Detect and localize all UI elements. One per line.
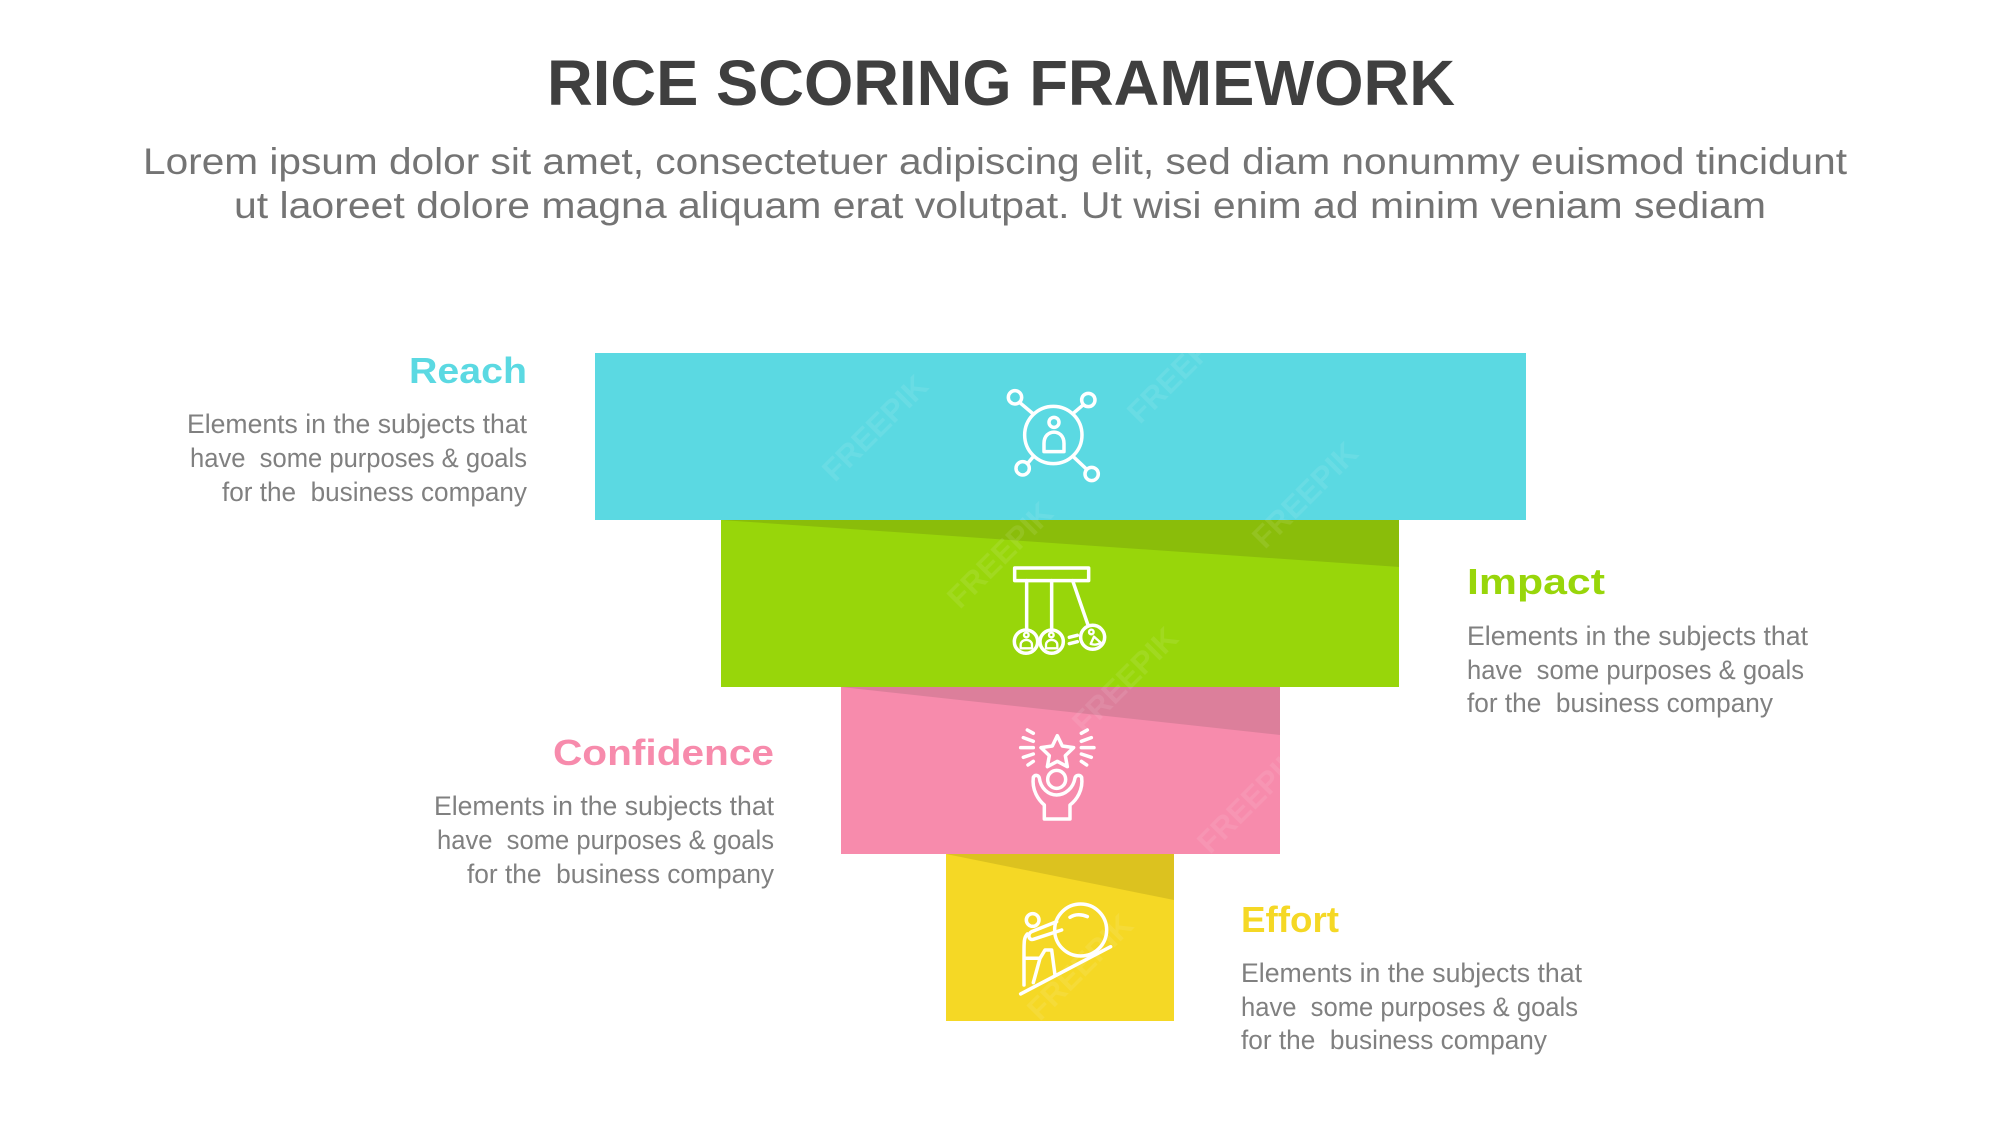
text block: impact: Impact — [1467, 561, 1605, 602]
subtitle: ut laoreet dolore magna aliquam erat volutpat. Ut wisi enim ad minim veniam sediam — [234, 185, 1766, 226]
funnel chart — [595, 353, 1526, 1021]
text: FREEPIK — [815, 368, 935, 488]
text: FREEPIK — [1120, 310, 1240, 430]
text: FREEPIK — [1065, 620, 1185, 740]
text block: confidence: Confidence — [553, 732, 774, 773]
icon: effort person pushing boulder — [1021, 904, 1111, 994]
text block: confidence: Elements in the subjects that — [434, 791, 774, 821]
text: FREEPIK — [940, 495, 1060, 615]
subtitle — [143, 141, 1848, 226]
text: FREEPIK — [1020, 907, 1140, 1027]
text block: reach — [187, 350, 527, 507]
panel: reach bar — [595, 353, 1526, 520]
icon: impact pendulum — [1014, 568, 1105, 653]
text block: confidence — [434, 732, 774, 889]
text block: reach: Reach — [409, 350, 527, 391]
text block: effort — [1241, 899, 1582, 1055]
text block: confidence: have some purposes & goals — [437, 825, 774, 855]
text block: effort: Elements in the subjects that — [1241, 958, 1582, 988]
icon: reach network — [1008, 391, 1098, 481]
text: FREEPIK — [1190, 740, 1310, 860]
panel: confidence bar — [841, 687, 1280, 854]
text block: reach: Elements in the subjects that — [187, 409, 527, 439]
text block: effort: Effort — [1241, 899, 1339, 940]
text block: impact: for the business company — [1467, 688, 1773, 718]
text block: confidence: for the business company — [467, 859, 774, 889]
title: RICE SCORING FRAMEWORK — [547, 47, 1455, 119]
panel: effort bar — [946, 854, 1174, 1021]
text block: impact: have some purposes & goals — [1467, 655, 1804, 685]
text block: effort: have some purposes & goals — [1241, 992, 1578, 1022]
icon: confidence star and person — [1021, 730, 1094, 819]
subtitle: Lorem ipsum dolor sit amet, consectetuer adipiscing elit, sed diam nonummy euismod tincidunt — [143, 141, 1848, 182]
text block: impact — [1467, 561, 1808, 718]
text block: reach: for the business company — [222, 477, 527, 507]
text block: impact: Elements in the subjects that — [1467, 621, 1808, 651]
text block: reach: have some purposes & goals — [190, 443, 527, 473]
panel: impact bar — [721, 520, 1399, 687]
text: FREEPIK — [1245, 435, 1365, 555]
text block: effort: for the business company — [1241, 1025, 1547, 1055]
